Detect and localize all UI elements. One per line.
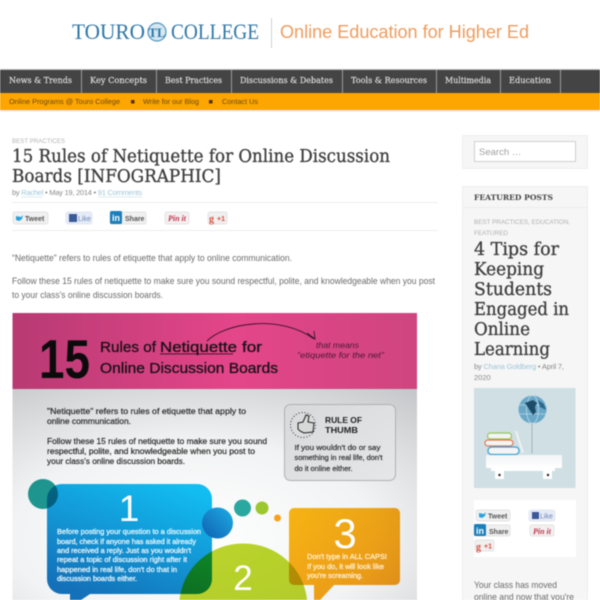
- button: share: [474, 524, 510, 536]
- laptop: [515, 431, 524, 453]
- icon: thumbs up: [290, 412, 316, 438]
- main navigation bar: News & Trends: [9, 76, 72, 85]
- big number 15: 15: [39, 328, 90, 390]
- bubble 1 text: happened in real life, don't do that in: [57, 565, 177, 574]
- infographic intro text: "Netiquette" refers to rules of etiquette that apply to: [47, 407, 247, 416]
- button: like: [66, 212, 92, 224]
- share buttons row: [13, 211, 227, 225]
- infographic heading: Rules of: [100, 339, 157, 356]
- featured post title: 4 Tips for: [474, 240, 560, 260]
- button: like: Like: [540, 514, 553, 520]
- main navigation bar: Education: [509, 76, 551, 85]
- bubble 1 text: and received a reply. Just as you wouldn't: [57, 546, 191, 555]
- panel: grey background: [12, 389, 417, 600]
- featured post illustration: [474, 388, 576, 488]
- featured post excerpt: Your class has moved: [474, 580, 557, 591]
- article title: Boards [INFOGRAPHIC]: [12, 167, 221, 187]
- featured post byline: [474, 362, 564, 382]
- main navigation bar: Multimedia: [445, 76, 491, 85]
- button: share: Share: [489, 529, 509, 536]
- rule of thumb heading: RULE OF: [325, 415, 362, 425]
- panel: rule of thumb: [284, 404, 396, 480]
- speech bubble 3: [289, 508, 400, 600]
- rule of thumb text: something in real life, don't: [294, 455, 383, 462]
- button: share: in: [476, 526, 484, 536]
- featured post byline: 2020: [474, 373, 491, 382]
- button: +1: +1: [217, 216, 225, 223]
- main navigation bar: Discussions & Debates: [240, 76, 333, 85]
- rule of thumb text: If you wouldn't do or say: [294, 445, 381, 452]
- rule of thumb heading: THUMB: [325, 425, 358, 435]
- note: etiquette for the net: that means: [316, 340, 360, 350]
- sidebar: featured posts panel: [462, 186, 588, 600]
- button: tweet: Tweet: [25, 216, 45, 223]
- featured post title: Keeping: [474, 260, 544, 280]
- bubble 1 text: [57, 527, 201, 583]
- sidebar: search panel: [462, 136, 588, 168]
- number 3: 3: [333, 510, 357, 557]
- main navigation bar: [0, 69, 600, 93]
- logo: Touro College: [72, 19, 259, 44]
- button: +1: [208, 212, 227, 225]
- infographic heading: [100, 340, 278, 374]
- desk: [486, 455, 562, 479]
- infographic intro text: your class's online discussion boards.: [47, 457, 185, 466]
- circle: small blue: [202, 508, 233, 538]
- button: like: Like: [78, 216, 91, 223]
- button: share: Share: [125, 216, 145, 223]
- number 1: 1: [119, 488, 139, 529]
- featured post byline: by Chana Goldberg • April 7,: [474, 362, 564, 371]
- arrow: curved pointer: [207, 324, 315, 341]
- secondary orange bar: Online Programs @ Touro College: [9, 97, 120, 106]
- button: pin it: Pin it: [533, 527, 552, 536]
- logo: Touro College: COLLEGE: [171, 19, 259, 44]
- secondary orange bar: Write for our Blog: [143, 97, 199, 106]
- button: tweet: [13, 212, 48, 224]
- featured posts heading: FEATURED POSTS: [474, 193, 553, 202]
- button: tweet: Tweet: [488, 514, 508, 520]
- main navigation bar: Key Concepts: [90, 76, 147, 85]
- rule of thumb text: do it online either.: [294, 466, 353, 473]
- circle: teal overlap: [28, 479, 58, 509]
- panel: pink header: [12, 313, 417, 389]
- infographic heading: Online Discussion Boards: [100, 360, 278, 377]
- main navigation bar: Tools & Resources: [351, 76, 427, 85]
- button: pin it: Pin it: [168, 214, 187, 223]
- infographic intro text: respectful, polite, and knowledgeable when you post to: [47, 447, 256, 456]
- books: [485, 433, 519, 454]
- bubble 1 text: discussion boards either.: [57, 574, 137, 583]
- button: share: in: [112, 213, 120, 223]
- featured post category: BEST PRACTICES, EDUCATION,: [474, 219, 570, 226]
- infographic heading: Netiquette: [160, 339, 237, 356]
- number 2: 2: [233, 559, 253, 598]
- article byline: by Rachel • May 19, 2014 • 91 Comments: [12, 188, 142, 197]
- bubble 1 text: Before posting your question to a discussion: [57, 527, 201, 536]
- secondary orange bar: [0, 93, 600, 112]
- rule of thumb heading: [325, 415, 362, 435]
- button: +1: g: [209, 214, 214, 225]
- intro paragraph: “Netiquette” refers to rules of etiquette that apply to online communication.: [12, 253, 292, 264]
- follow paragraph: Follow these 15 rules of netiquette to make sure you sound respectful, polite, and knowledgeable when you post: [12, 276, 435, 287]
- logo: Touro College: TL: [148, 25, 166, 40]
- button: +1: +1: [484, 544, 492, 550]
- circle: orange dot: [274, 514, 281, 522]
- infographic: [12, 313, 417, 600]
- featured post title: [474, 240, 569, 360]
- article title: [12, 147, 390, 187]
- featured post category: [474, 219, 570, 237]
- sidebar: search panel: Search …: [479, 147, 521, 158]
- featured post category: FEATURED: [474, 230, 508, 237]
- featured post title: Students: [474, 280, 552, 300]
- infographic intro text: online communication.: [47, 417, 131, 426]
- note: etiquette for the net: [297, 340, 385, 360]
- featured post title: Online: [474, 320, 530, 340]
- speech bubble 1: [28, 479, 212, 600]
- infographic intro text: [47, 407, 267, 466]
- speech bubble 2: [180, 543, 307, 600]
- dotted stem: [531, 424, 533, 453]
- globe: [518, 396, 546, 424]
- main navigation bar: Best Practices: [165, 76, 222, 85]
- bubble 3 text: If you do, it will look like: [307, 562, 384, 571]
- circle: teal dot: [234, 500, 251, 516]
- bubble 3 text: [307, 552, 387, 580]
- bubble 3 text: you're screaming.: [307, 571, 363, 580]
- rule of thumb text: [294, 445, 383, 473]
- button: share: [110, 211, 146, 224]
- logo divider: [271, 18, 272, 48]
- article title: 15 Rules of Netiquette for Online Discussion: [12, 147, 390, 167]
- note: etiquette for the net: “etiquette for the net”: [297, 350, 385, 360]
- secondary orange bar: Contact Us: [222, 97, 258, 106]
- bubble 3 text: Don't type in ALL CAPS!: [307, 552, 387, 561]
- infographic heading: for: [242, 339, 262, 356]
- circle: lime dot: [256, 502, 268, 514]
- bubble 1 text: board, check if anyone has asked it already: [57, 537, 196, 546]
- tagline: Online Education for Higher Ed: [280, 22, 529, 42]
- follow paragraph: [12, 276, 435, 301]
- follow paragraph: to your class’s online discussion boards.: [12, 290, 163, 301]
- featured post title: Learning: [474, 340, 550, 360]
- sidebar share panel: [474, 500, 576, 557]
- logo: Touro College: TOURO: [72, 19, 145, 44]
- infographic intro text: Follow these 15 rules of netiquette to make sure you sound: [47, 437, 267, 446]
- featured post excerpt: [474, 580, 574, 600]
- button: +1: g: [476, 542, 481, 553]
- button: +1: [475, 540, 494, 553]
- article category: BEST PRACTICES: [12, 138, 66, 145]
- featured post title: Engaged in: [474, 300, 569, 320]
- bubble 1 text: repeat a topic of discussion right after it: [57, 555, 187, 564]
- button: pin it: [165, 212, 189, 224]
